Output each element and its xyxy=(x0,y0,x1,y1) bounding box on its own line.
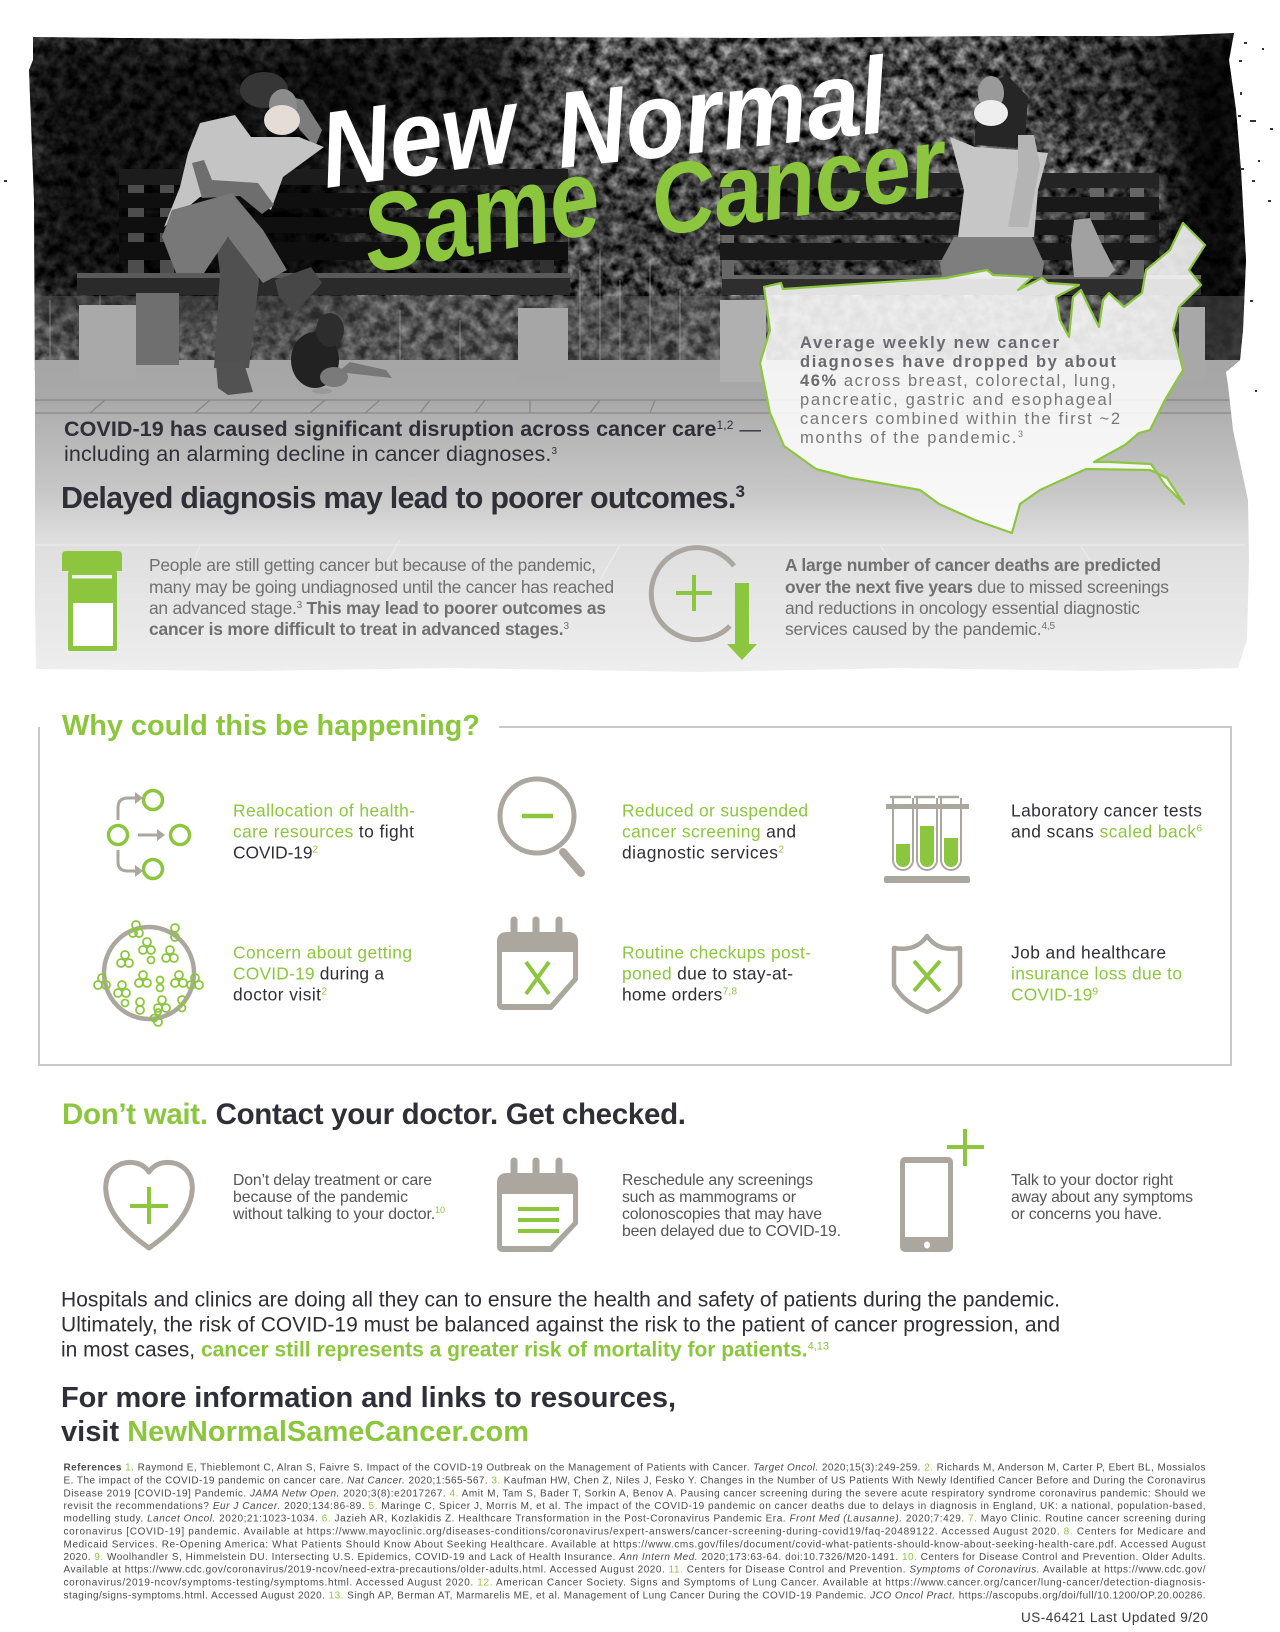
icon: magnifier xyxy=(500,779,581,873)
text: undiagnosed: cancer is more difficult to treat in advanced stages. xyxy=(149,619,564,639)
title: New xyxy=(312,63,529,211)
text: reallocation xyxy=(233,800,415,862)
map text: cancers combined within the first ~2 xyxy=(800,410,1120,428)
text: screening: 2 xyxy=(778,844,784,856)
references: Available at https://www.cdc.gov/coronavirus/2019-ncov/need-extra-precautions/older-adults.html. Accessed August 2020. 11. Centers for Disease Control and Prevention. Symptoms of Coronavirus. Available at https://www.cdc.gov/ xyxy=(64,1564,1206,1576)
text: don't delay: 10 xyxy=(435,1205,445,1215)
text: reschedule: Reschedule any screenings xyxy=(622,1172,813,1189)
text: undiagnosed: an advanced stage. xyxy=(149,598,297,618)
references: References 1. Raymond E, Thieblemont C, Alran S, Faivre S. Impact of the COVID-19 Outbreak on the Management of Patients with Cancer. Target Oncol. 2020;15(3):249-259. 2. Richards M, Anderson M, Carter P, Ebert BL, Mossialos xyxy=(64,1462,1206,1474)
map text: 3 xyxy=(1018,429,1023,439)
intro text: — xyxy=(733,417,762,441)
text: undiagnosed: People are still getting cancer but because of the pandemic, xyxy=(149,555,596,575)
text: lab tests: Laboratory cancer tests xyxy=(1011,800,1202,820)
heading: don't wait: Don’t wait. Contact your doctor. Get checked. xyxy=(62,1098,686,1131)
paragraph: balance of risk: 4,13 xyxy=(808,1340,829,1352)
references xyxy=(64,1462,1206,1602)
text: checkups: Routine checkups post- xyxy=(622,942,811,962)
text: reallocation: 2 xyxy=(312,844,318,856)
icon: decline arrow xyxy=(651,548,757,660)
icon: virus xyxy=(94,921,203,1026)
heading: why: Why could this be happening? xyxy=(62,710,480,742)
text: reschedule: been delayed due to COVID-19. xyxy=(622,1223,841,1240)
text: reallocation: care resources to fight xyxy=(233,822,414,842)
man on bench xyxy=(162,72,324,395)
intro text: 3 xyxy=(551,446,557,457)
panel: hero photo xyxy=(10,10,1265,680)
text: insurance xyxy=(1011,942,1182,1004)
torn edge specks xyxy=(4,42,1273,392)
text: insurance: Job and healthcare xyxy=(1011,942,1166,962)
text: talk to doctor xyxy=(1011,1172,1193,1223)
footer code: US-46421 Last Updated 9/20 xyxy=(1021,1610,1208,1625)
text: don't delay: because of the pandemic xyxy=(233,1189,408,1206)
icon: pill bottle xyxy=(62,551,122,651)
text: checkups xyxy=(622,942,811,1004)
text: concern: COVID-19 during a xyxy=(233,964,384,984)
icon: heart plus xyxy=(106,1162,192,1248)
text: reschedule: such as mammograms or xyxy=(622,1189,796,1206)
text: screening: Reduced or suspended xyxy=(622,800,808,820)
text: concern: Concern about getting xyxy=(233,942,412,962)
left bench xyxy=(77,169,570,382)
text: don't delay: Don’t delay treatment or care xyxy=(233,1172,432,1189)
intro text: including an alarming decline in cancer diagnoses. xyxy=(64,442,551,466)
call to action xyxy=(61,1382,676,1448)
text: insurance: 9 xyxy=(1092,986,1098,998)
paragraph: balance of risk: in most cases, cancer still represents a greater risk of mortality for patients. xyxy=(61,1338,808,1362)
title: Same xyxy=(353,134,609,297)
text: screening: cancer screening and xyxy=(622,822,796,842)
text: screening xyxy=(622,800,808,862)
text: checkups: home orders xyxy=(622,984,722,1004)
icon: shield x xyxy=(894,936,960,1012)
text: concern: doctor visit xyxy=(233,984,321,1004)
text: talk to doctor: or concerns you have. xyxy=(1011,1206,1162,1223)
intro text xyxy=(64,417,762,466)
references: revisit the recommendations? Eur J Cancer. 2020;134:86-89. 5. Maringe C, Spicer J, Morris M, et al. The impact of the COVID-19 pandemic on cancer deaths due to delays in diagnosis in England, UK: a national, population-based, xyxy=(64,1501,1206,1512)
text: predicted deaths: and reductions in oncology essential diagnostic xyxy=(785,598,1140,618)
title xyxy=(312,34,956,297)
text: undiagnosed: This may lead to poorer outcomes as xyxy=(302,598,606,618)
icon: test tubes xyxy=(884,797,970,883)
intro text: COVID-19 has caused significant disruption across cancer care xyxy=(64,417,716,441)
references: staging/signs-symptoms.html. Accessed August 2020. 13. Singh AP, Berman AT, Marmarelis ME, et al. Management of Lung Cancer During the COVID-19 Pandemic. JCO Oncol Pract. https://ascopubs.org/doi/full/10.1200/OP.20.00286. xyxy=(64,1590,1206,1602)
call to action: visit NewNormalSameCancer.com xyxy=(61,1416,529,1448)
heading: delayed diagnosis: 3 xyxy=(736,482,745,501)
references: coronavirus/2019-ncov/symptoms-testing/symptoms.html. Accessed August 2020. 12. American Cancer Society. Signs and Symptoms of Lung Cancer. Available at https://www.cancer.org/cancer/lung-cancer/detection-diagnosis- xyxy=(64,1578,1206,1588)
text: checkups: poned due to stay-at- xyxy=(622,964,793,984)
text: reallocation: Reallocation of health- xyxy=(233,800,415,820)
text: talk to doctor: Talk to your doctor right xyxy=(1011,1172,1174,1189)
references: coronavirus [COVID-19] pandemic. Available at https://www.mayoclinic.org/diseases-conditions/coronavirus/expert-answers/cancer-screening-during-covid19/faq-20489122. Accessed August 2020. 8. Centers for Medicare and xyxy=(64,1526,1205,1538)
dog xyxy=(291,313,392,394)
references: modelling study. Lancet Oncol. 2020;21:1023-1034. 6. Jazieh AR, Kozlakidis Z. Healthcare Transformation in the Post-Coronavirus Pandemic Era. Front Med (Lausanne). 2020;7:429. 7. Mayo Clinic. Routine cancer screening during xyxy=(64,1514,1206,1524)
text: talk to doctor: away about any symptoms xyxy=(1011,1189,1193,1206)
map: United States xyxy=(760,223,1205,533)
references: E. The impact of the COVID-19 pandemic on cancer care. Nat Cancer. 2020;1:565-567. 3. Kaufman HW, Chen Z, Niles J, Fesko Y. Changes in the Number of US Patients With Newly Identified Cancer Before and During the Coronavirus xyxy=(64,1476,1205,1486)
text: don't delay xyxy=(232,1172,445,1223)
text: predicted deaths: 4,5 xyxy=(1041,621,1055,632)
map text xyxy=(800,334,1120,447)
text: predicted deaths xyxy=(785,555,1169,639)
text: concern xyxy=(233,942,412,1004)
panel: why could this be happening xyxy=(39,710,1231,1065)
text: lab tests xyxy=(1011,800,1202,842)
heading: delayed diagnosis: Delayed diagnosis may lead to poorer outcomes. xyxy=(61,481,736,515)
paragraph: balance of risk: Hospitals and clinics are doing all they can to ensure the health and safety of patients during the pandemic. xyxy=(61,1288,1060,1312)
text: undiagnosed: 3 xyxy=(297,600,303,611)
references: 2020. 9. Woolhandler S, Himmelstein DU. Intersecting U.S. Epidemics, COVID-19 and Lack of Health Insurance. Ann Intern Med. 2020;173:63-64. doi:10.7326/M20-1491. 10. Centers for Disease Control and Prevention. Older Adults. xyxy=(64,1552,1206,1563)
text: checkups: 7,8 xyxy=(723,986,737,998)
map text: 46% across breast, colorectal, lung, xyxy=(800,372,1116,390)
text: concern: 2 xyxy=(321,986,327,998)
references: Medicaid Services. Re-Opening America: What Patients Should Know About Seeking Healthcare. Available at https://www.cms.gov/files/document/covid-what-patients-should-know-about-seeking-health-care.pdf. Accessed August xyxy=(64,1540,1206,1550)
paragraph: balance of risk xyxy=(61,1288,1060,1362)
icon: phone plus xyxy=(900,1129,984,1252)
text: predicted deaths: over the next five years due to missed screenings xyxy=(785,577,1169,597)
right bench xyxy=(720,173,1205,382)
woman on bench xyxy=(940,75,1115,277)
text: insurance: COVID-19 xyxy=(1011,984,1092,1004)
text: screening: diagnostic services xyxy=(622,842,778,862)
pavement bricks xyxy=(34,400,1240,413)
ground xyxy=(25,360,1255,680)
title: Normal xyxy=(549,34,894,191)
grass strip xyxy=(30,250,1250,362)
map text: pancreatic, gastric and esophageal xyxy=(800,391,1112,409)
text: undiagnosed: many may be going undiagnosed until the cancer has reached xyxy=(149,577,614,597)
map text: months of the pandemic. xyxy=(800,429,1016,447)
map text: diagnoses have dropped by about xyxy=(800,353,1116,371)
call to action: For more information and links to resources, xyxy=(61,1382,676,1414)
references: Disease 2019 [COVID-19] Pandemic. JAMA Netw Open. 2020;3(8):e2017267. 4. Amit M, Tam S, Bader T, Sorkin A, Benov A. Pausing cancer screening during the severe acute respiratory syndrome coronavirus pandemic: Should we xyxy=(64,1488,1206,1500)
text: don't delay: without talking to your doctor. xyxy=(233,1206,435,1223)
text: reallocation: COVID-19 xyxy=(233,842,313,862)
text: lab tests: and scans scaled back xyxy=(1011,822,1196,842)
text: undiagnosed: 3 xyxy=(563,621,569,632)
text: predicted deaths: services caused by the pandemic. xyxy=(785,619,1042,639)
text: reschedule: colonoscopies that may have xyxy=(622,1206,822,1223)
text: lab tests: 6 xyxy=(1196,824,1202,834)
pavement paving lines xyxy=(35,540,1245,580)
map text: Average weekly new cancer xyxy=(800,334,1060,352)
paragraph: balance of risk: Ultimately, the risk of COVID-19 must be balanced against the risk to the patient of cancer progression, and xyxy=(61,1314,1060,1336)
intro text: 1,2 xyxy=(717,418,734,432)
icon: calendar x xyxy=(497,920,578,1010)
icon: reallocation xyxy=(108,790,190,878)
text: reschedule xyxy=(622,1172,841,1240)
title: Cancer xyxy=(643,105,956,258)
text: insurance: insurance loss due to xyxy=(1011,964,1182,984)
icon: calendar list xyxy=(497,1161,578,1252)
text: undiagnosed xyxy=(149,555,614,639)
text: predicted deaths: A large number of cancer deaths are predicted xyxy=(785,555,1161,575)
